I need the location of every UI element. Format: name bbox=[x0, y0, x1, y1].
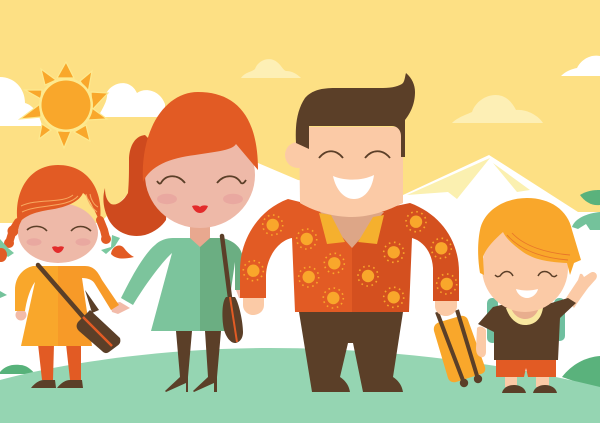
hair bbox=[478, 198, 581, 275]
trousers bbox=[299, 312, 403, 392]
pigtail: right bbox=[100, 220, 134, 259]
bush: right bbox=[562, 356, 600, 390]
face: eyes, cheeks and mouth bbox=[157, 176, 246, 213]
head bbox=[145, 122, 255, 228]
face: eyes, cheeks and mouth bbox=[26, 226, 91, 253]
shoes bbox=[502, 385, 557, 393]
shirt sun pattern bbox=[243, 212, 457, 308]
suitcase bbox=[434, 310, 485, 387]
shorts bbox=[496, 360, 556, 377]
character: boy bbox=[476, 198, 597, 393]
hair bbox=[143, 92, 258, 182]
face: eyes and smile bbox=[495, 272, 557, 298]
face: eyes and smile bbox=[319, 151, 390, 199]
neck bbox=[190, 220, 210, 250]
foliage: right edge leaves bbox=[572, 190, 600, 230]
shoulder bag bbox=[38, 265, 120, 353]
head bbox=[18, 203, 98, 263]
back hair with flip bbox=[103, 135, 170, 236]
coat bbox=[121, 238, 242, 331]
snow cap: right flank bbox=[493, 163, 530, 192]
ground bbox=[0, 348, 600, 423]
neck bbox=[511, 308, 539, 319]
head bbox=[482, 224, 568, 312]
clouds bbox=[0, 56, 600, 126]
hand: holding mother's hand bbox=[110, 302, 130, 314]
hair bbox=[296, 73, 415, 157]
legs bbox=[505, 375, 549, 387]
hand bbox=[236, 290, 243, 298]
character: father bbox=[240, 73, 485, 392]
sun bbox=[20, 62, 108, 148]
handbag bbox=[222, 236, 243, 343]
pigtail: left bbox=[0, 222, 18, 262]
character: mother bbox=[103, 92, 258, 392]
collar bbox=[319, 213, 384, 244]
foliage: left edge leaf bbox=[0, 291, 7, 298]
boots bbox=[165, 331, 221, 392]
neck opening bbox=[320, 212, 384, 248]
hands bbox=[243, 296, 457, 316]
hair bbox=[17, 165, 101, 224]
character: girl bbox=[0, 165, 134, 388]
t-shirt bbox=[478, 298, 576, 360]
dress bbox=[15, 266, 119, 346]
ear bbox=[285, 142, 311, 168]
backpack straps bbox=[487, 298, 565, 343]
collar bbox=[506, 308, 543, 325]
head bbox=[299, 127, 403, 217]
bush: left bbox=[0, 365, 35, 374]
shoes bbox=[31, 380, 83, 388]
hand: left bbox=[16, 310, 26, 320]
snow cap: left flank bbox=[407, 158, 490, 199]
legs bbox=[38, 344, 81, 380]
arm: left bbox=[476, 327, 486, 357]
arm: waving bbox=[566, 272, 597, 308]
shirt bbox=[240, 199, 459, 312]
